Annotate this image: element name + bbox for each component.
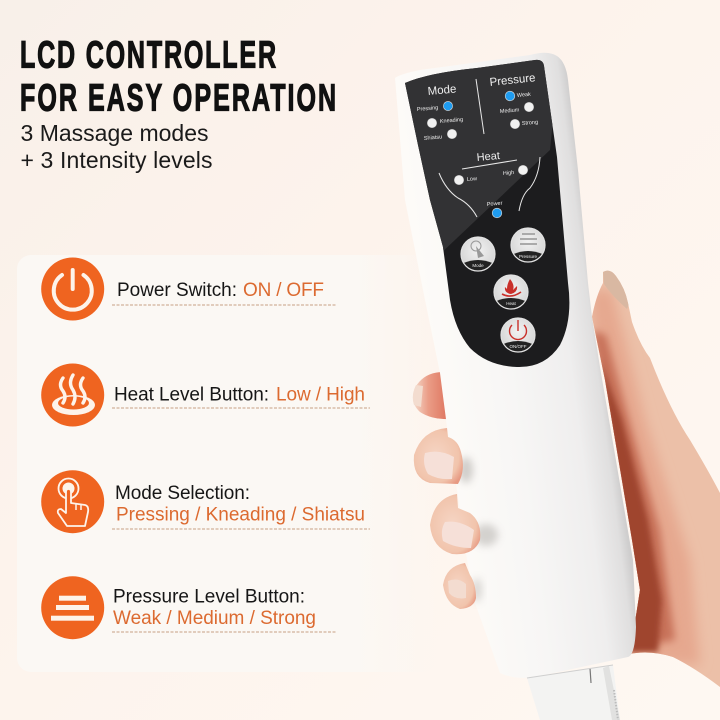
label: heat: Heat Level Button: bbox=[114, 384, 269, 406]
remote body bbox=[395, 53, 636, 678]
label: heat bbox=[114, 384, 365, 406]
panel labels: Mode bbox=[427, 84, 457, 98]
subtitle bbox=[20, 120, 212, 173]
title: FOR EASY OPERATION bbox=[20, 76, 336, 119]
control panel bbox=[405, 60, 570, 367]
finger 3 bbox=[430, 494, 480, 554]
finger shadows bbox=[459, 457, 498, 602]
panel labels: Heat bbox=[476, 150, 500, 164]
button: on/off: ON/OFF bbox=[510, 344, 527, 349]
label: power: Power Switch: bbox=[117, 280, 237, 301]
hand: fingers in front bbox=[413, 385, 480, 609]
remote controller bbox=[395, 50, 636, 678]
panel: features card bbox=[17, 255, 437, 672]
title bbox=[20, 33, 336, 119]
label: power bbox=[117, 280, 324, 301]
finger 4 bbox=[443, 563, 476, 609]
panel labels: Power bbox=[487, 201, 503, 208]
icon: power bbox=[41, 258, 104, 320]
finger: index behind remote bbox=[413, 372, 452, 419]
button: pressure: Pressure bbox=[519, 254, 537, 259]
panel labels bbox=[417, 72, 538, 208]
panel lines bbox=[439, 79, 540, 217]
feature: power switch bbox=[41, 258, 337, 320]
icon: mode bbox=[41, 470, 104, 533]
button: heat bbox=[494, 275, 528, 309]
panel labels: Strong bbox=[522, 120, 538, 127]
button: heat: Heat bbox=[506, 301, 516, 306]
subtitle: + 3 Intensity levels bbox=[20, 147, 212, 173]
indicator lights bbox=[427, 91, 534, 218]
title: LCD CONTROLLER bbox=[20, 33, 276, 76]
button: mode bbox=[461, 237, 495, 271]
feature: mode selection bbox=[41, 470, 370, 533]
connector bbox=[527, 665, 620, 720]
label: mode bbox=[115, 483, 365, 526]
feature: heat level bbox=[41, 364, 370, 426]
button: pressure bbox=[511, 228, 545, 262]
hand: thumb and palm bbox=[592, 270, 720, 687]
thumb nail bbox=[603, 269, 629, 309]
label: mode: Pressing / Kneading / Shiatsu bbox=[116, 504, 365, 526]
index nail bbox=[413, 385, 423, 407]
panel labels: Shiatsu bbox=[424, 134, 442, 142]
label: heat: Low / High bbox=[276, 384, 365, 406]
feature: pressure level bbox=[41, 576, 337, 639]
panel labels: Pressure bbox=[489, 72, 536, 89]
panel labels: Kneading bbox=[440, 117, 463, 125]
icon: pressure bbox=[41, 576, 104, 639]
icon: heat bbox=[41, 364, 104, 426]
label: mode: Mode Selection: bbox=[115, 483, 250, 504]
panel labels: Low bbox=[467, 176, 477, 183]
panel labels: High bbox=[503, 170, 514, 177]
panel labels: Medium bbox=[500, 107, 520, 115]
panel labels: Weak bbox=[517, 92, 531, 99]
panel labels: Pressing bbox=[417, 105, 438, 113]
button: mode: Mode bbox=[472, 263, 484, 268]
label: pressure: Weak / Medium / Strong bbox=[113, 608, 316, 629]
label: pressure bbox=[113, 586, 316, 629]
label: power: ON / OFF bbox=[243, 280, 324, 301]
label: pressure: Pressure Level Button: bbox=[113, 586, 305, 608]
finger 2 bbox=[414, 428, 463, 484]
subtitle: 3 Massage modes bbox=[20, 120, 208, 146]
button: on/off bbox=[501, 318, 535, 352]
